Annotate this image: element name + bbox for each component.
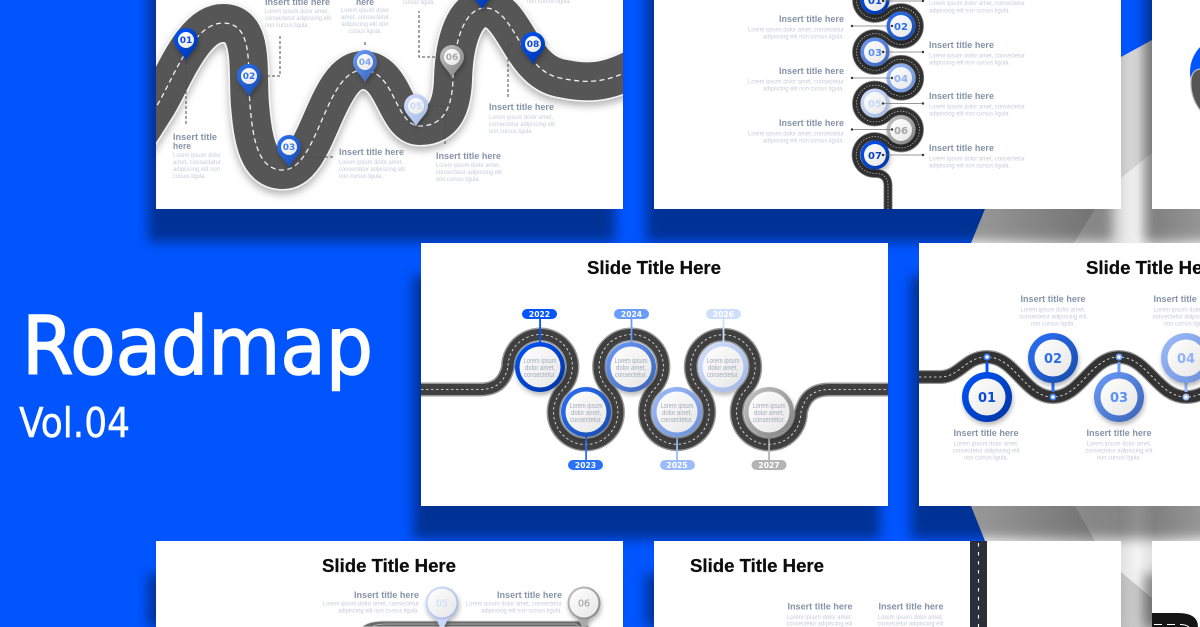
- step 04: 04: [1177, 352, 1195, 367]
- pin 02: 02: [243, 72, 255, 82]
- panel: bottom right cropped slide: [1152, 541, 1200, 627]
- text block 02: Lorem ipsum dolor amet,: [265, 8, 329, 15]
- black road corner: [1152, 613, 1198, 627]
- step 02: [1028, 333, 1078, 400]
- circle 2025: Lorem ipsum: [660, 403, 694, 410]
- label 2022: 2022: [529, 310, 550, 319]
- marker 06: [886, 116, 916, 144]
- text block right: [878, 602, 944, 627]
- panel: cropped slide top right: [1152, 0, 1200, 209]
- text block right: Insert title here: [878, 602, 944, 612]
- text block 04: amet, consectetur: [341, 14, 390, 21]
- bubble 06: [568, 586, 600, 627]
- circle 2026: consectetur.: [707, 372, 739, 379]
- left text blocks: Insert title here: [779, 66, 844, 76]
- text block right: Lorem ipsum dolor amet,: [878, 614, 943, 621]
- left text blocks: Insert title here: [779, 14, 844, 24]
- left text blocks: adipiscing elit non cursus ligula.: [763, 86, 844, 92]
- right text blocks: adipiscing elit non cursus ligula.: [929, 110, 1010, 118]
- bubble 05: 05: [436, 598, 448, 610]
- text block 02: Lorem ipsum dolor amet,: [1020, 306, 1086, 314]
- text block 03: Lorem ipsum dolor amet,: [339, 159, 403, 166]
- text block 01: [173, 132, 222, 180]
- text block 05: Lorem ipsum dolor amet,: [436, 162, 500, 169]
- circle 2026: dolor amet,: [708, 365, 738, 372]
- pin 04: [353, 50, 377, 83]
- pin 03: [277, 135, 301, 168]
- circle 2024: Lorem ipsum: [614, 358, 648, 365]
- slide title: Slide Title Here: [322, 556, 456, 576]
- right text blocks: Insert title here: [929, 40, 994, 50]
- right text blocks: Insert title here: [929, 143, 994, 153]
- left text blocks: adipiscing elit non cursus ligula.: [763, 138, 844, 144]
- pin 08: 08: [527, 40, 539, 50]
- right text blocks: adipiscing elit non cursus ligula.: [929, 60, 1010, 66]
- bubble 05: [426, 586, 458, 627]
- marker 07: [860, 140, 890, 170]
- vertical road: [970, 541, 987, 627]
- step 04: [1161, 333, 1200, 400]
- text block 01: cursus ligula.: [173, 173, 206, 180]
- text block 05: [323, 590, 420, 614]
- bubble 06: 06: [578, 598, 590, 610]
- label 2024: [614, 309, 649, 343]
- text block 08: Insert title here: [489, 102, 554, 112]
- pin 02: [237, 64, 261, 97]
- circle 2025: consectetur.: [661, 417, 693, 424]
- label 2025: [660, 436, 695, 470]
- slide title: Slide Title Here: [587, 258, 721, 278]
- circle 2024: dolor amet,: [616, 365, 646, 372]
- label 2027: 2027: [758, 461, 780, 470]
- text block 01: Lorem ipsum dolor amet,: [954, 440, 1019, 448]
- text block 02: Insert title here: [1020, 294, 1086, 304]
- right text blocks: adipiscing elit non cursus ligula.: [929, 8, 1010, 14]
- marker 02: 02: [894, 22, 908, 33]
- text block 05: Insert title here: [354, 590, 419, 600]
- label 2022: [522, 309, 557, 343]
- circle 2023: [561, 387, 611, 437]
- text block 03: [1086, 428, 1153, 462]
- pin 01: 01: [180, 36, 192, 46]
- text block 05: adipiscing elit non cursus ligula.: [338, 608, 419, 614]
- text block 01: non cursus ligula.: [964, 454, 1008, 462]
- dashed leader lines: [186, 11, 513, 157]
- text block 01: adipiscing elit non: [173, 166, 220, 173]
- text block 03: non cursus ligula.: [1097, 454, 1141, 462]
- step 01: 01: [978, 391, 996, 406]
- icon: cropped blue circle with road: [1190, 47, 1200, 111]
- text block left: Lorem ipsum dolor amet,: [787, 614, 852, 621]
- heading: Roadmap: Roadmap: [22, 300, 373, 393]
- text block 05: Lorem ipsum dolor amet, consectetur: [323, 600, 420, 608]
- pin 03: 03: [283, 143, 295, 153]
- marker 07: 07: [868, 151, 882, 162]
- label 2023: [568, 436, 603, 470]
- text block 04: adipiscing elit non: [342, 21, 389, 28]
- pin 05: [404, 94, 428, 127]
- text block 03: consectetur adipiscing elit: [339, 166, 405, 173]
- label 2026: [706, 309, 741, 343]
- panel: winding road slide with pins: [130, 0, 640, 209]
- circle 2026: [698, 342, 748, 392]
- text block 03: non cursus ligula.: [339, 173, 383, 180]
- left text blocks: Insert title here: [779, 118, 844, 128]
- right text blocks: Insert title here: [929, 91, 994, 101]
- left text blocks: Lorem ipsum dolor amet, consectetur: [748, 78, 845, 86]
- marker 01: [860, 0, 890, 14]
- circle 2027: consectetur.: [753, 417, 785, 424]
- step 03: [1094, 354, 1144, 422]
- connector lines: [851, 0, 924, 156]
- label 2025: 2025: [666, 461, 688, 470]
- winding road: [130, 8, 640, 170]
- heading: Vol.04: Vol.04: [19, 399, 130, 447]
- text block 02: [1020, 294, 1087, 328]
- text block 01: Lorem ipsum dolor: [173, 152, 222, 159]
- label 2026: 2026: [713, 310, 734, 319]
- text block 04: Lorem ipsum dolor: [341, 7, 390, 14]
- text block 08: non cursus ligula.: [489, 128, 533, 135]
- text block 03: Insert title here: [1086, 428, 1152, 438]
- text block left: Insert title here: [788, 602, 853, 612]
- wave road: [919, 357, 1200, 397]
- right text blocks: [929, 0, 1026, 170]
- text block left: [786, 602, 853, 627]
- left text blocks: adipiscing elit non cursus ligula.: [763, 34, 844, 40]
- right text blocks: Lorem ipsum dolor amet, consectetur: [929, 156, 1026, 162]
- marker 02: [886, 12, 916, 40]
- text block 01: [952, 428, 1020, 462]
- marker 03: [860, 38, 890, 66]
- circle 2023: dolor amet,: [571, 410, 601, 417]
- text block 01: amet, consectetur: [173, 159, 222, 166]
- pin 08: [521, 32, 545, 65]
- pin 01: [174, 28, 198, 61]
- text block 01: here: [173, 141, 191, 151]
- text block 08: Lorem ipsum dolor amet,: [489, 114, 553, 121]
- step 02: 02: [1044, 352, 1062, 367]
- text block 02: non cursus ligula.: [1031, 320, 1075, 328]
- marker 05: 05: [868, 99, 882, 110]
- marker 06: 06: [894, 126, 908, 137]
- circle 2024: consectetur.: [615, 372, 647, 379]
- pin 05: 05: [410, 102, 422, 112]
- text block 08: [489, 102, 555, 135]
- text block 04: cursus ligula.: [348, 28, 382, 35]
- marker 04: [886, 64, 916, 92]
- text block 03: Lorem ipsum dolor amet,: [1086, 440, 1152, 448]
- text block 02: consectetur adipiscing elit: [265, 15, 331, 22]
- text block 02: [265, 0, 331, 29]
- left text blocks: [748, 14, 845, 144]
- label 2023: 2023: [575, 461, 596, 470]
- panel: bottom left slide: [156, 541, 623, 627]
- circle 2025: dolor amet,: [662, 410, 692, 417]
- text block 05: non cursus ligula.: [436, 176, 480, 183]
- snake road: [856, 0, 920, 209]
- right text blocks: Lorem ipsum dolor amet, consectetur: [929, 0, 1026, 7]
- circle 2023: consectetur.: [570, 417, 602, 424]
- text block 08: consectetur adipiscing elit: [489, 121, 555, 128]
- circle 2027: [744, 387, 794, 437]
- circle 2025: [652, 387, 702, 437]
- circle 2022: [515, 342, 565, 392]
- text block 06: Lorem ipsum dolor amet, consectetur: [466, 600, 563, 608]
- text block 03: Insert title here: [339, 147, 404, 157]
- left text blocks: Lorem ipsum dolor amet, consectetur: [748, 26, 845, 34]
- marker 04: 04: [894, 74, 908, 85]
- pin 04: 04: [359, 58, 371, 68]
- panel: wave road slide: [919, 243, 1200, 506]
- text block 02: non cursus ligula.: [265, 22, 309, 29]
- circle 2022: dolor amet,: [525, 365, 555, 372]
- text block 05: Insert title here: [436, 151, 501, 161]
- text block 06: Insert title here: [497, 590, 562, 600]
- right text blocks: Lorem ipsum dolor amet, consectetur: [929, 104, 1026, 110]
- text block 02: consectetur adipiscing elit: [1020, 314, 1087, 320]
- circle 2022: Lorem ipsum: [524, 358, 557, 365]
- panel: year timeline road slide: [421, 243, 888, 506]
- road: [362, 621, 589, 627]
- label 2027: [752, 436, 786, 470]
- text block 06: [466, 590, 563, 614]
- text block 03: [339, 147, 405, 180]
- slide title: Slide Title Here: [690, 556, 824, 576]
- text block 05: [436, 151, 502, 183]
- circle 2026: Lorem ipsum: [706, 358, 740, 365]
- text block 06: adipiscing elit non cursus ligula.: [481, 608, 562, 614]
- text block 01: Insert title here: [954, 428, 1019, 438]
- text block 01: Insert title: [173, 132, 217, 142]
- label 2024: 2024: [621, 310, 642, 319]
- text block 05: consectetur adipiscing elit: [436, 169, 502, 176]
- left text blocks: Lorem ipsum dolor amet, consectetur: [748, 130, 845, 138]
- pin 06: [440, 45, 464, 78]
- panel: bottom centre slide: [654, 541, 1121, 627]
- pin 07: [470, 0, 494, 10]
- circle 2022: consectetur.: [524, 372, 556, 379]
- panel: vertical snake road slide: [654, 0, 1121, 209]
- circle 2027: Lorem ipsum: [752, 403, 786, 410]
- text block 04: [1152, 294, 1200, 328]
- right text blocks: Lorem ipsum dolor amet, consectetur: [929, 52, 1026, 60]
- circle 2027: dolor amet,: [754, 410, 784, 417]
- circle 2024: [606, 342, 656, 392]
- marker 05: [860, 88, 890, 118]
- text block 01: consectetur adipiscing elit: [952, 448, 1020, 454]
- pin 06: 06: [446, 53, 458, 63]
- step 01: [962, 354, 1012, 422]
- circle 2023: Lorem ipsum: [570, 403, 603, 410]
- text block 03: consectetur adipiscing elit: [1086, 448, 1153, 454]
- right text blocks: adipiscing elit non cursus ligula.: [929, 162, 1010, 170]
- text block 04: [341, 0, 390, 35]
- looping road: [421, 335, 888, 444]
- marker 03: 03: [868, 48, 882, 59]
- step 03: 03: [1110, 391, 1128, 406]
